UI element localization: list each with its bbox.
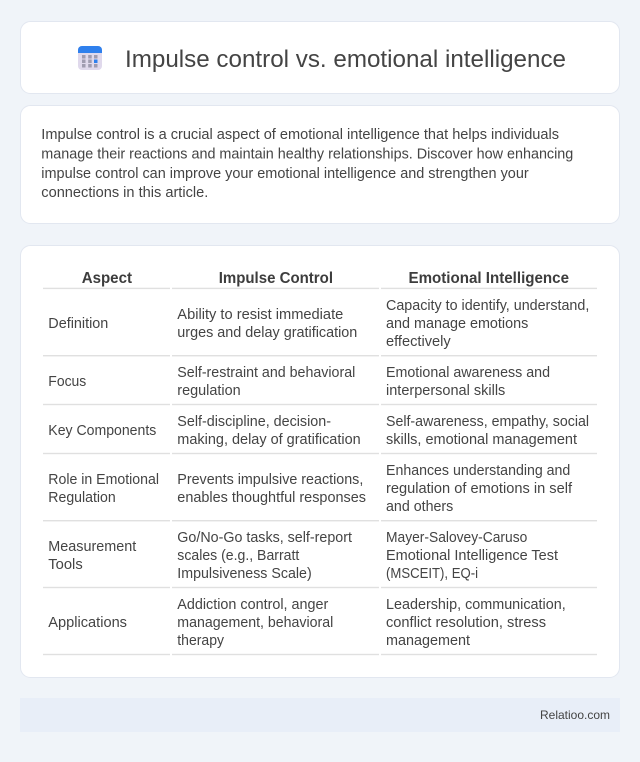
table row: role in emotional regulation — [43, 463, 597, 521]
table row: key components: Key Components — [48, 423, 156, 439]
table row: focus: Focus — [48, 374, 86, 390]
table row: measurement tools: Measurement — [48, 539, 136, 555]
table row: key components: Self-discipline, decision- — [177, 414, 331, 430]
table row: measurement tools: (MSCEIT), EQ-i — [386, 566, 478, 582]
table header: Aspect — [82, 270, 133, 287]
text block: introduction: connections in this article. — [41, 185, 208, 201]
table row: measurement tools: scales (e.g., Barratt — [177, 548, 299, 564]
table row: measurement tools: Tools — [48, 557, 83, 573]
title: Impulse control vs. emotional intelligence — [125, 46, 566, 73]
text block: introduction: Impulse control is a crucial aspect of emotional intelligence that helps individuals — [41, 127, 559, 143]
table row: applications: management, behavioral — [177, 615, 333, 631]
table row: definition: Definition — [48, 316, 108, 332]
text block: introduction: impulse control can improve your emotional intelligence and strengthen your — [41, 166, 529, 182]
table row: focus: Self-restraint and behavioral — [177, 365, 355, 381]
table row: measurement tools: Go/No-Go tasks, self-report — [177, 530, 352, 546]
table row: definition: urges and delay gratification — [177, 325, 357, 341]
table row: measurement tools: Mayer-Salovey-Caruso — [386, 530, 527, 546]
table row: definition: Ability to resist immediate — [177, 307, 343, 323]
footer — [20, 698, 620, 732]
table header — [43, 270, 597, 289]
panel: title card — [20, 22, 620, 94]
table row: applications: therapy — [177, 633, 225, 649]
table row: applications: Applications — [48, 615, 127, 631]
table row: key components: Self-awareness, empathy, social — [386, 414, 589, 430]
table header: Emotional Intelligence — [408, 270, 569, 287]
table row: applications: management — [386, 633, 470, 649]
table row: applications — [43, 597, 597, 655]
table row: definition: Capacity to identify, understand, — [386, 298, 589, 314]
icon: calendar — [78, 46, 102, 70]
table row: definition: effectively — [386, 334, 452, 350]
panel: introduction — [20, 106, 620, 224]
table row: role in emotional regulation: and others — [386, 499, 453, 515]
text block: introduction — [41, 127, 573, 201]
table row: role in emotional regulation: Enhances understanding and — [386, 463, 570, 479]
table row: key components — [43, 414, 597, 454]
table row: applications: conflict resolution, stress — [386, 615, 546, 631]
table row: focus: Emotional awareness and — [386, 365, 550, 381]
table row: role in emotional regulation: regulation of emotions in self — [386, 481, 573, 497]
panel: comparison table — [20, 246, 620, 678]
table row: definition: and manage emotions — [386, 316, 528, 332]
footer credit: Relatioo.com — [540, 708, 610, 722]
table row: focus: interpersonal skills — [386, 383, 505, 399]
table row: role in emotional regulation: Prevents impulsive reactions, — [177, 472, 363, 488]
table row: focus: regulation — [177, 383, 241, 399]
table row: measurement tools — [43, 530, 597, 588]
table row: applications: Leadership, communication, — [386, 597, 566, 613]
table row: measurement tools: Impulsiveness Scale) — [177, 566, 312, 582]
table row: applications: Addiction control, anger — [177, 597, 328, 613]
table row: key components: skills, emotional management — [386, 432, 577, 448]
table row: definition — [43, 298, 597, 356]
table row: role in emotional regulation: Regulation — [48, 490, 116, 506]
table row: focus — [43, 365, 597, 405]
text block: introduction: manage their reactions and maintain healthy relationships. Discover how enhancing — [41, 146, 573, 162]
table row: key components: making, delay of gratification — [177, 432, 361, 448]
table row: measurement tools: Emotional Intelligence Test — [386, 548, 558, 564]
table header: Impulse Control — [219, 270, 333, 287]
table row: role in emotional regulation: enables thoughtful responses — [177, 490, 366, 506]
table row: role in emotional regulation: Role in Emotional — [48, 472, 159, 488]
